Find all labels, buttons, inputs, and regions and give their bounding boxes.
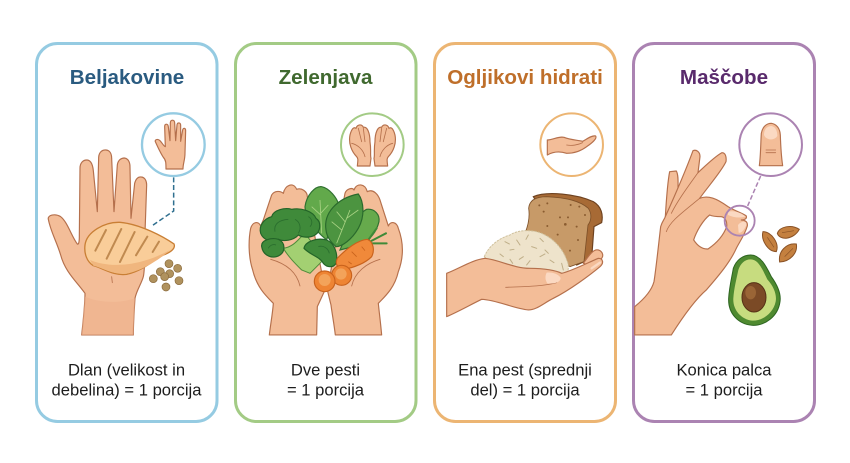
heading: Maščobe: Maščobe [680, 66, 768, 89]
caption: Maščobe: Konica palca [676, 360, 772, 380]
hand back fingers [665, 171, 678, 217]
panel: Ogljikovi hidrati [434, 44, 616, 422]
icon circle: thumb tip [739, 113, 802, 176]
illustration: hand with rice and bread [447, 113, 603, 317]
dashed connector [747, 176, 761, 207]
panel: Zelenjava [236, 44, 416, 422]
icon: left cupped hand [249, 185, 325, 335]
heading: Beljakovine: Beljakovine [70, 66, 184, 89]
dashed connector [153, 177, 174, 225]
lentils [149, 260, 183, 291]
carrot slices [332, 265, 352, 285]
caption: Zelenjava line 2: = 1 porcija [287, 380, 365, 400]
almonds [763, 226, 799, 262]
icon: OK hand [635, 150, 747, 335]
heading: Ogljikovi hidrati: Ogljikovi hidrati [447, 66, 603, 89]
caption: Zelenjava: Dve pesti [291, 360, 360, 380]
hand [447, 258, 603, 317]
illustration: palm with chicken and lentils [48, 113, 205, 335]
carrot [336, 239, 373, 270]
icon: right cupped hand [327, 185, 402, 335]
bread [533, 194, 602, 265]
almond grain lines [767, 231, 794, 257]
icon circle: cupped hand [540, 113, 603, 176]
illustration: OK-sign hand with avocado and almonds [635, 113, 802, 335]
icon circle: palm [142, 113, 205, 176]
caption: Ogljikovi hidrati: Ena pest (sprednji [458, 360, 592, 380]
caption: Beljakovine: Dlan (velikost in [68, 360, 185, 380]
caption: Ogljikovi hidrati line 2: del) = 1 porcija [470, 380, 580, 400]
icon circle: two hands [341, 113, 404, 176]
carrot greens [368, 228, 387, 243]
spinach leaves [305, 187, 338, 240]
highlight circle [725, 206, 755, 236]
chicken breast [85, 222, 174, 275]
heading: Zelenjava: Zelenjava [279, 66, 373, 89]
rice mound [484, 231, 568, 277]
caption: Beljakovine line 2: debelina) = 1 porcija [52, 380, 202, 400]
broccoli stem [283, 233, 323, 273]
broccoli florets [260, 209, 320, 241]
panel: Maščobe [634, 44, 814, 422]
icon: open palm [48, 150, 147, 335]
caption: Maščobe line 2: = 1 porcija [685, 380, 763, 400]
avocado [729, 255, 780, 325]
hand fingers behind [583, 250, 603, 267]
panel: Beljakovine [36, 44, 217, 422]
illustration: cupped hands with vegetables [249, 113, 404, 335]
